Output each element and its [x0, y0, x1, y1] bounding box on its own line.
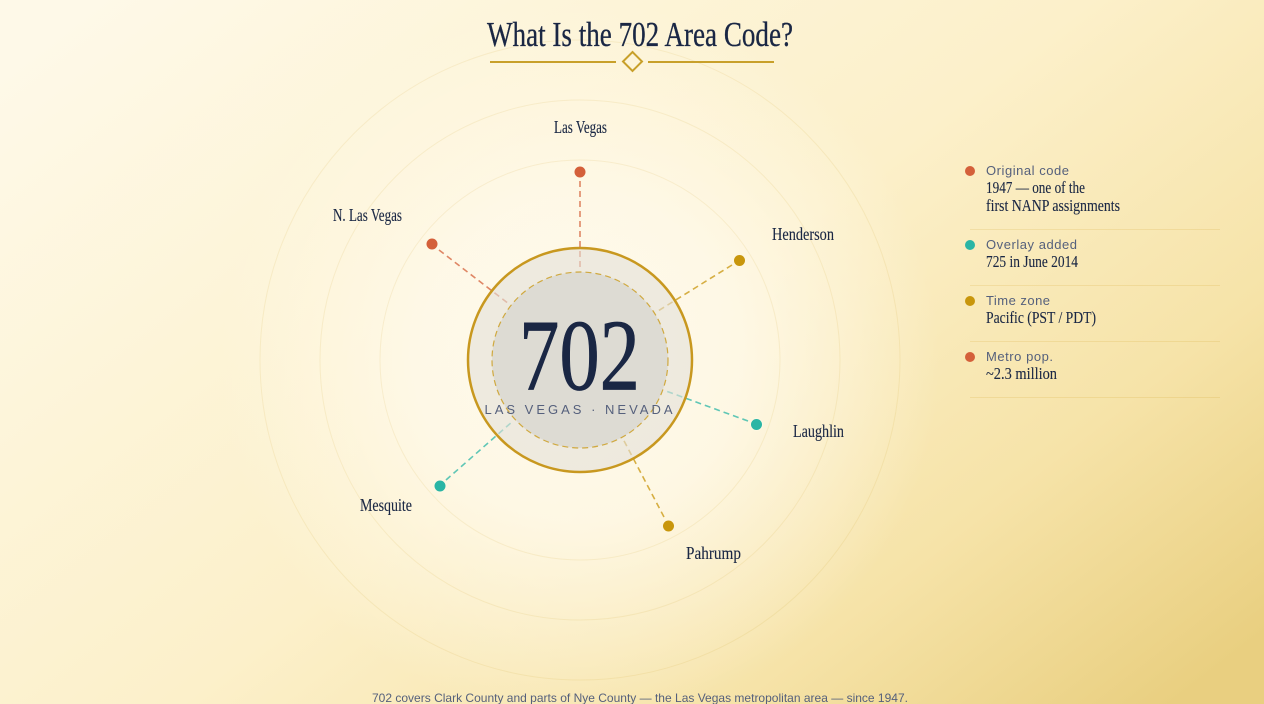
node: Mesquite: Mesquite	[360, 495, 412, 515]
fact: time zone: Pacific (PST / PDT)	[986, 308, 1096, 327]
connector: Laughlin	[666, 391, 748, 421]
concentric rings	[260, 40, 900, 680]
fact: time zone	[965, 293, 1096, 327]
fact: original code: Original code	[986, 163, 1069, 178]
connector: Las Vegas	[579, 181, 581, 269]
fact: metro population	[965, 349, 1057, 383]
title: What Is the 702 Area Code?	[487, 15, 793, 54]
fact: metro population: Metro pop.	[986, 349, 1053, 364]
node: Laughlin	[750, 418, 844, 441]
fact: original code: 1947 — one of the	[986, 178, 1085, 197]
badge subtitle: LAS VEGAS · NEVADA	[484, 402, 673, 417]
node: Henderson	[734, 224, 834, 266]
node: Henderson: Henderson	[772, 224, 834, 244]
connector: Mesquite	[446, 421, 513, 480]
node: Pahrump	[663, 520, 741, 563]
node: Las Vegas	[554, 117, 607, 178]
fact panel	[965, 163, 1220, 398]
fact: original code	[965, 163, 1120, 215]
fact: overlay added: 725 in June 2014	[986, 252, 1078, 271]
fact: overlay added	[965, 237, 1078, 271]
node: Laughlin: Laughlin	[793, 421, 844, 441]
fact: overlay added: Overlay added	[986, 237, 1077, 252]
fact: time zone: Time zone	[986, 293, 1050, 308]
fact: original code: first NANP assignments	[986, 196, 1120, 215]
node: Mesquite	[360, 480, 446, 515]
node: Pahrump: Pahrump	[686, 543, 741, 563]
connector: N. Las Vegas	[439, 250, 509, 304]
connector: Henderson	[658, 265, 732, 311]
area code number: 702	[519, 300, 640, 412]
node: N. Las Vegas	[333, 205, 438, 250]
title divider with diamond	[490, 52, 774, 71]
node: N. Las Vegas: N. Las Vegas	[333, 205, 402, 225]
node: Las Vegas: Las Vegas	[554, 117, 607, 137]
fact: metro population: ~2.3 million	[986, 364, 1057, 383]
center badge	[468, 248, 692, 472]
connector: Pahrump	[622, 437, 664, 517]
